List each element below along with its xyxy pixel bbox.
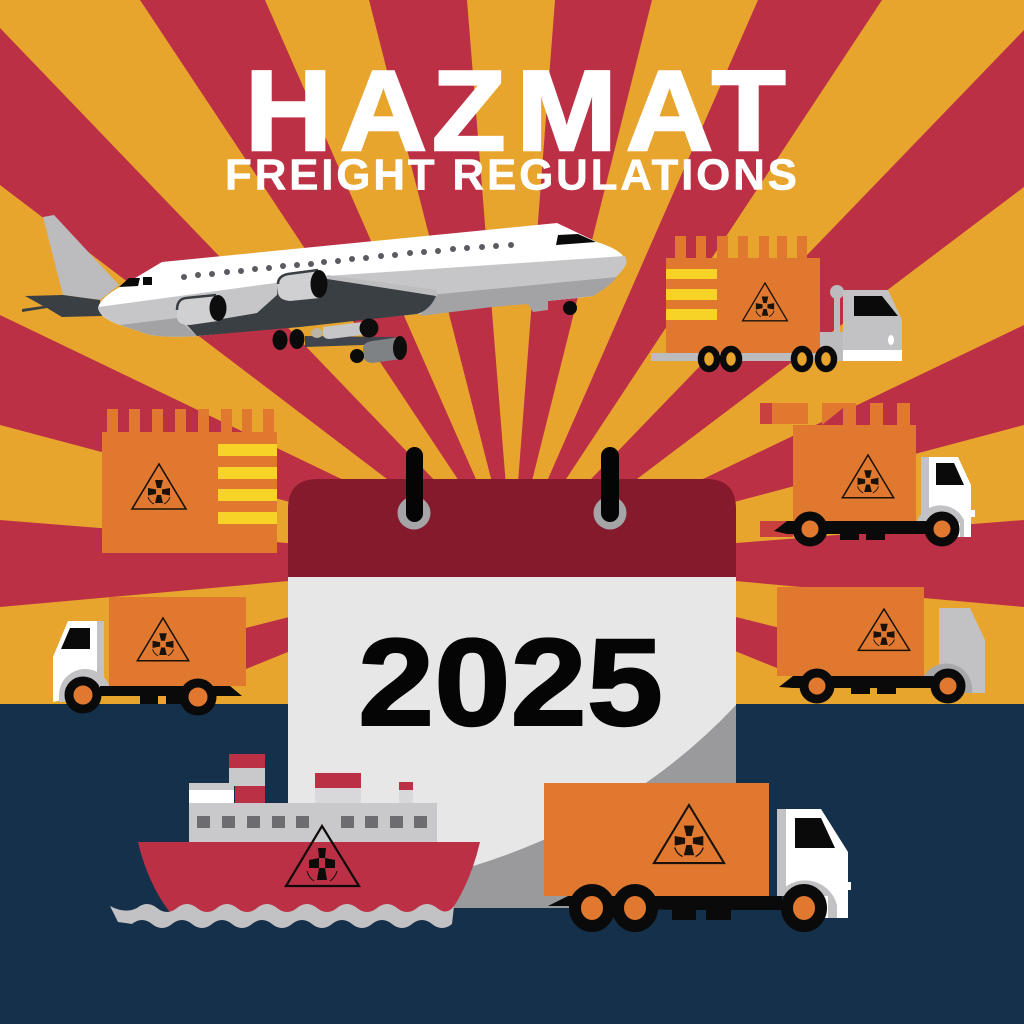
calendar (288, 447, 736, 908)
yellow stripes (218, 444, 277, 524)
portholes (197, 816, 427, 828)
truck: right upper (760, 403, 975, 542)
title (225, 47, 797, 200)
upper deck (189, 790, 234, 803)
chassis (100, 686, 242, 704)
gear strut (305, 336, 397, 347)
engines (177, 270, 407, 363)
engine four (363, 336, 407, 363)
airplane (22, 215, 626, 363)
truck: front large (544, 783, 851, 926)
year: 2025 (358, 614, 663, 752)
superstructure (189, 803, 437, 842)
heading: hazmat: HAZMAT (245, 47, 786, 174)
exhaust pipe (834, 292, 840, 336)
chassis (548, 896, 782, 920)
landing gear wheels (272, 301, 577, 363)
hazard sign (286, 826, 359, 886)
container: left striped (102, 409, 277, 553)
engine two (278, 270, 328, 301)
truck: left (53, 597, 246, 711)
truck: right lower (777, 587, 985, 699)
fuselage lower band (98, 256, 626, 337)
wing (187, 278, 436, 336)
chassis (651, 353, 846, 361)
cab (777, 809, 786, 896)
container (666, 236, 820, 353)
wheels (804, 673, 830, 699)
fender (777, 880, 837, 918)
container (109, 597, 246, 686)
page curl shadow (430, 705, 736, 908)
wheels (575, 890, 609, 926)
waves (110, 904, 454, 928)
cab (921, 457, 929, 519)
yellow stripes (666, 269, 717, 320)
windows (181, 242, 514, 280)
hazard sign (858, 609, 910, 650)
cab (939, 608, 985, 693)
chassis (779, 676, 933, 694)
cab (53, 621, 104, 702)
hazard sign (842, 455, 894, 498)
subheading: freight regulations: FREIGHT REGULATIONS (225, 150, 797, 200)
funnels (229, 754, 413, 803)
binder ring left (398, 447, 430, 530)
calendar header (288, 479, 736, 577)
hazard sign (137, 618, 189, 661)
container (544, 783, 769, 896)
hazard sign (654, 805, 724, 863)
hazard sign (132, 464, 186, 509)
binder ring right (594, 447, 626, 530)
tail stabilizer (22, 295, 102, 317)
cargo ship (110, 754, 480, 928)
fender (916, 505, 964, 537)
chassis (774, 521, 930, 540)
belly shadow (420, 277, 617, 316)
cockpit windows (119, 234, 596, 287)
wheels (69, 681, 97, 709)
engine one (177, 295, 226, 325)
wheels (701, 349, 834, 369)
wheels (797, 516, 823, 542)
sunburst background (0, 0, 1024, 710)
fender (924, 663, 972, 693)
container (777, 587, 924, 676)
container (760, 403, 916, 537)
fender (59, 669, 109, 702)
tail fin (43, 215, 119, 300)
truck: top right with striped container (651, 236, 902, 369)
fuselage (98, 223, 625, 337)
engine three (311, 318, 378, 339)
hazard sign (743, 283, 787, 321)
hull (138, 842, 480, 915)
calendar page (288, 570, 736, 908)
cab (843, 290, 902, 352)
navy ground band (0, 704, 1024, 1024)
